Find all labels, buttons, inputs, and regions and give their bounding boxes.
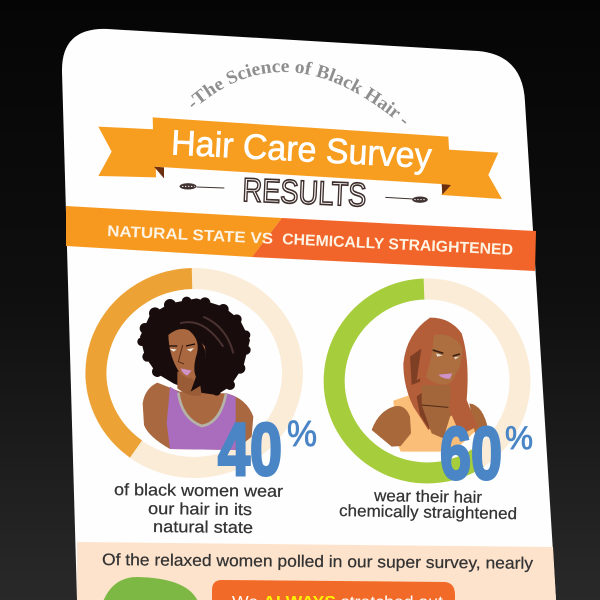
band label: chemically straightened: CHEMICALLY STRAIGHTENED	[282, 231, 513, 259]
section band: natural vs straightened	[66, 206, 536, 271]
callout: always stretched	[212, 580, 455, 600]
heading: Hair Care Survey: Hair Care Survey	[170, 123, 433, 176]
stat: 60%: %	[505, 420, 533, 456]
caption: chemically straightened: chemically straightened	[339, 502, 517, 523]
panel: survey card	[62, 29, 556, 600]
band label: natural state vs: NATURAL STATE VS	[107, 223, 273, 248]
curved subtitle: -The Science of Black Hair -	[190, 62, 406, 124]
stat: 60%: 60	[440, 412, 502, 495]
icon: right wheat arrow	[385, 197, 428, 203]
stat: 40%: 40	[218, 408, 282, 491]
icon: green blob	[102, 577, 199, 600]
caption: chemically straightened	[339, 487, 517, 523]
caption: natural state: our hair in its	[148, 500, 252, 519]
banner ribbon	[98, 117, 502, 214]
poll intro text: Of the relaxed women polled in our super survey, nearly	[102, 551, 534, 573]
caption: chemically straightened: wear their hair	[373, 487, 483, 507]
donut chart: natural 40%	[96, 278, 292, 468]
illustration: woman with natural hair	[137, 297, 253, 450]
illustration: woman with straightened hair	[372, 318, 488, 452]
caption: natural state	[114, 481, 284, 537]
stat: 40%: %	[287, 413, 317, 454]
caption: natural state: of black women wear	[114, 481, 284, 501]
icon: left wheat arrow	[180, 183, 224, 189]
donut chart: chemically straightened 60%	[334, 289, 520, 473]
panel: relaxed women poll	[77, 542, 556, 600]
heading: Results: RESULTS	[242, 172, 367, 214]
caption: natural state: natural state	[153, 518, 253, 537]
